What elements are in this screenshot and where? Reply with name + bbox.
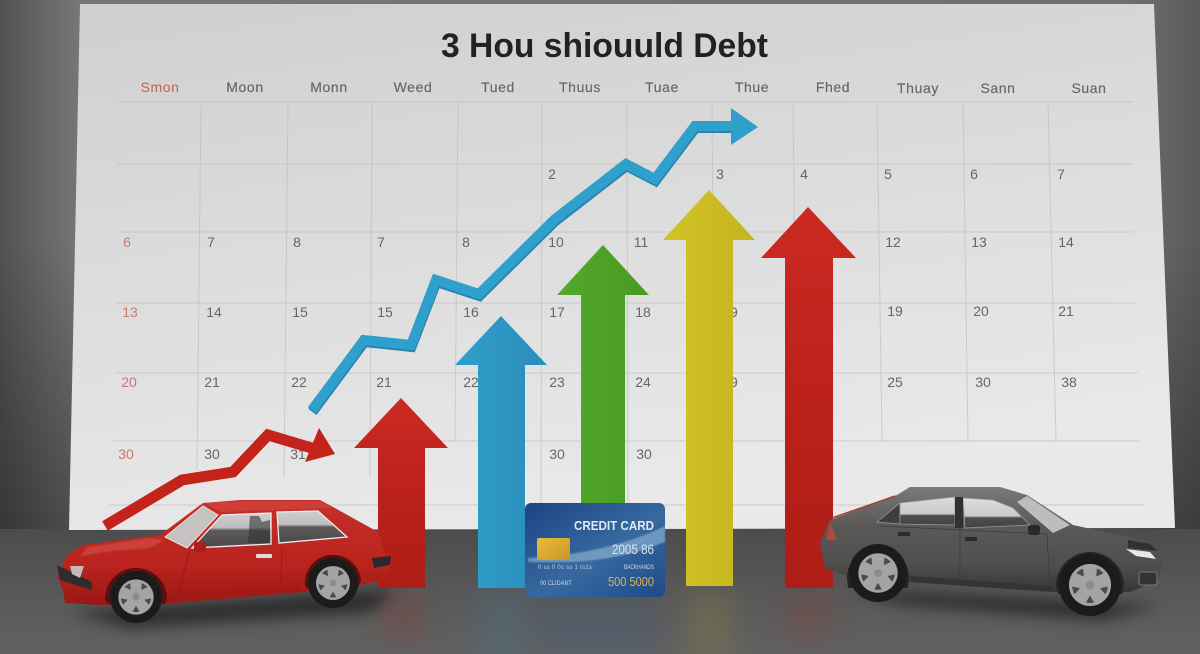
- grey car lower grille: [1139, 572, 1157, 585]
- calendar day numbers: 7: [1057, 166, 1065, 182]
- calendar day numbers: 5: [884, 166, 892, 182]
- calendar day numbers: 22: [291, 374, 307, 390]
- weekday headers: Thuus: [559, 79, 601, 95]
- calendar day numbers: 7: [207, 234, 215, 250]
- grey car rear window: [900, 497, 955, 525]
- grey car quarter window: [877, 503, 900, 524]
- red car rear wheel arch: [305, 555, 361, 588]
- weekday headers: Moon: [226, 79, 264, 95]
- grey car mirror: [1028, 525, 1040, 535]
- calendar day numbers: 6: [123, 234, 131, 250]
- weekday headers: Weed: [394, 79, 432, 95]
- red car front bumper: [57, 565, 92, 590]
- calendar day numbers: 6: [970, 166, 978, 182]
- red car seat: [248, 516, 270, 543]
- icon: dark grey sedan car: [820, 487, 1163, 616]
- card heading: CREDIT CARD: [574, 519, 654, 533]
- floor: [0, 529, 1200, 654]
- calendar day numbers: 12: [885, 234, 901, 250]
- calendar day numbers: 31: [290, 446, 306, 462]
- title: 3 Hou shiouuld Debt: [441, 27, 768, 65]
- calendar day numbers: 30: [118, 446, 134, 462]
- arrow: blue rising trend line: [312, 108, 758, 412]
- arrow: blue bar: [455, 316, 547, 588]
- calendar paper: [69, 4, 1175, 530]
- grey car door handles: [898, 532, 977, 541]
- car floor shadows: [70, 590, 1160, 628]
- arrow: red tall bar: [761, 207, 856, 588]
- arrow: green bar: [557, 245, 649, 510]
- card fine print: 0 ss 0 0s ss 1 rs1s: [538, 565, 592, 571]
- calendar day numbers: 13: [971, 234, 987, 250]
- weekday headers: Suan: [1071, 80, 1107, 96]
- calendar day numbers: 20: [973, 303, 989, 319]
- calendar day numbers: 21: [376, 374, 392, 390]
- calendar day numbers: [118, 166, 1077, 462]
- calendar day numbers: 30: [549, 446, 565, 462]
- card holder: 00 CLIDANT: [540, 581, 572, 587]
- card amount: 500 5000: [608, 574, 654, 589]
- grey car rocker: [910, 576, 1053, 592]
- grey car body: [820, 487, 1163, 592]
- red car side window: [192, 513, 271, 548]
- calendar day numbers: 30: [204, 446, 220, 462]
- icon: red hatchback car: [57, 500, 391, 623]
- calendar day numbers: 24: [635, 374, 651, 390]
- red car windshield: [165, 506, 218, 548]
- panel: calendar sheet: [69, 4, 1175, 530]
- red car door handle: [256, 554, 272, 558]
- grey car front wheel arch: [1056, 552, 1124, 594]
- calendar grid: [110, 102, 1145, 505]
- calendar day numbers: 29: [722, 374, 738, 390]
- red car rear bumper: [372, 556, 391, 568]
- calendar day numbers: 10: [548, 234, 564, 250]
- red car mirror: [194, 542, 206, 553]
- calendar day numbers: 3: [716, 166, 724, 182]
- calendar day numbers: 15: [292, 304, 308, 320]
- grey car shoulder and door seams: [880, 526, 1050, 590]
- calendar day numbers: 2: [548, 166, 556, 182]
- calendar day numbers: 30: [636, 446, 652, 462]
- arrow: red rising trend line: [105, 428, 335, 526]
- weekday headers: Tued: [481, 79, 515, 95]
- weekday headers: [141, 79, 1107, 96]
- red car front wheel: [110, 571, 162, 623]
- credit card: [525, 503, 665, 597]
- card number: 2005 86: [612, 541, 654, 557]
- calendar day numbers: 4: [800, 166, 808, 182]
- calendar day numbers: 17: [549, 304, 565, 320]
- calendar day numbers: 11: [634, 234, 648, 250]
- red car hood highlight: [80, 538, 164, 556]
- weekday headers: Monn: [310, 79, 348, 95]
- card body: [525, 503, 665, 597]
- red car door seams: [178, 546, 282, 595]
- calendar day numbers: 19: [887, 303, 903, 319]
- grey car rear light: [826, 522, 837, 540]
- grey car front window: [963, 498, 1030, 528]
- calendar day numbers: 18: [635, 304, 651, 320]
- calendar day numbers: 14: [1058, 234, 1074, 250]
- calendar day numbers: 23: [549, 374, 565, 390]
- red car roof highlight: [205, 501, 332, 512]
- card chip: [537, 538, 570, 560]
- calendar day numbers: 30: [975, 374, 991, 390]
- arrow: red short bar: [354, 398, 448, 588]
- calendar day numbers: 8: [462, 234, 470, 250]
- grey car hood dark patch: [1128, 540, 1158, 551]
- calendar day numbers: 21: [1058, 303, 1074, 319]
- weekday headers: Smon: [141, 79, 179, 95]
- floor reflections of arrows and card: [380, 590, 831, 654]
- red car body: [57, 500, 390, 605]
- red car rocker: [173, 585, 302, 603]
- red car rear wheel: [308, 558, 358, 608]
- calendar day numbers: 7: [377, 234, 385, 250]
- grey car windshield: [1017, 496, 1070, 533]
- calendar day numbers: 13: [122, 304, 138, 320]
- calendar day numbers: 8: [293, 234, 301, 250]
- weekday headers: Fhed: [816, 79, 850, 95]
- calendar day numbers: 25: [887, 374, 903, 390]
- red car headlight: [70, 566, 84, 578]
- card sheen: [528, 526, 665, 562]
- weekday headers: Thue: [735, 79, 769, 95]
- card label: BACKHANDS: [624, 564, 654, 571]
- grey car headlight: [1126, 549, 1156, 559]
- grey car rear wheel arch: [847, 547, 909, 588]
- grey car B pillar: [955, 497, 963, 528]
- weekday headers: Tuae: [645, 79, 679, 95]
- weekday headers: Sann: [980, 80, 1016, 96]
- grey car front wheel: [1059, 554, 1121, 616]
- calendar day numbers: 22: [463, 374, 479, 390]
- calendar day numbers: 20: [121, 374, 137, 390]
- calendar day numbers: 38: [1061, 374, 1077, 390]
- calendar day numbers: 16: [463, 304, 479, 320]
- calendar day numbers: 19: [722, 304, 738, 320]
- calendar day numbers: 15: [377, 304, 393, 320]
- grey car boot reflection: [832, 496, 895, 518]
- arrow: yellow bar: [663, 190, 755, 586]
- grey car rear wheel: [849, 544, 907, 602]
- calendar day numbers: 14: [206, 304, 222, 320]
- calendar day numbers: 21: [204, 374, 220, 390]
- weekday headers: Thuay: [897, 80, 939, 96]
- red car front wheel arch: [105, 568, 167, 604]
- red car rear window: [277, 511, 347, 543]
